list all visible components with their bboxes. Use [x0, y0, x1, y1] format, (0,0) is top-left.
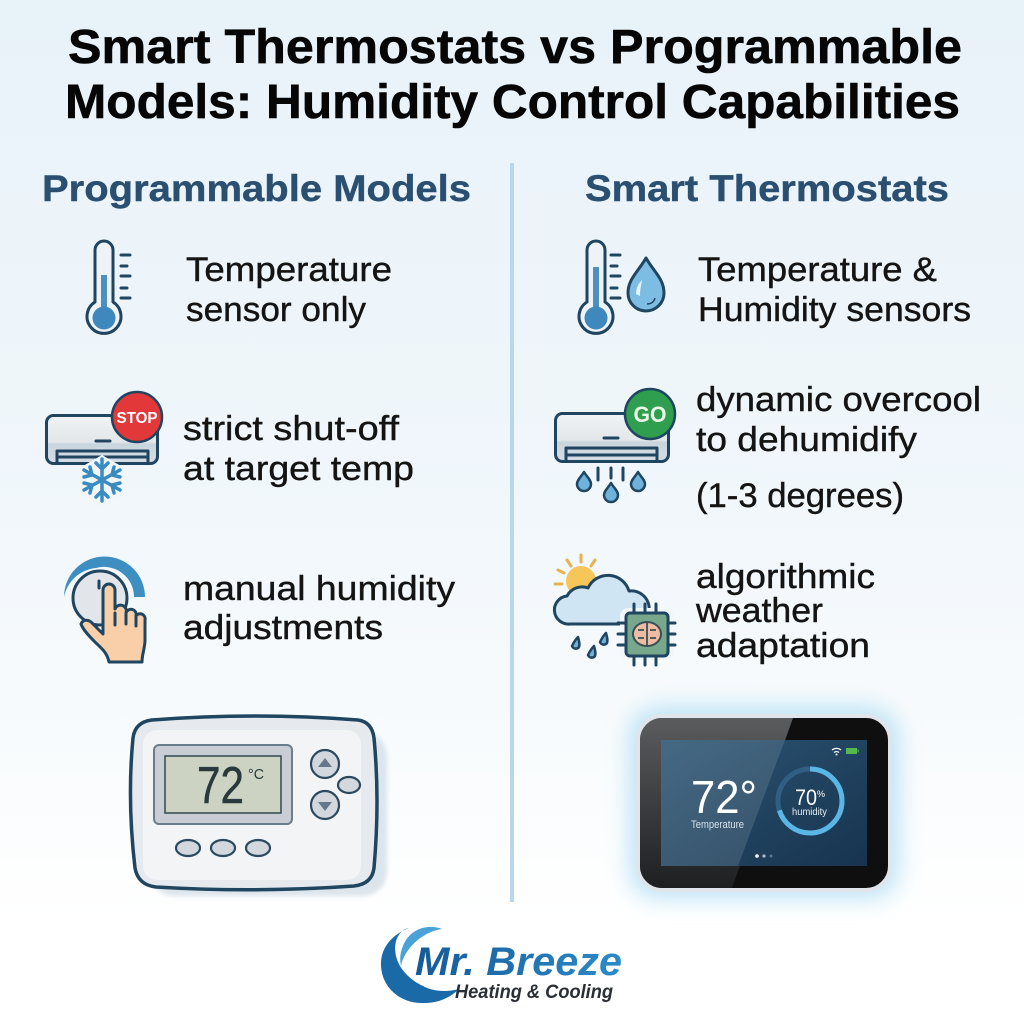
text: manual humidity adjustments: manual humidity [183, 570, 455, 608]
text: manual humidity adjustments [183, 570, 455, 647]
logo: Mr. Breeze Heating & Cooling [381, 927, 622, 1003]
text: algorithmic weather adaptation: algorithmic [696, 558, 875, 596]
icon: air conditioner with go sign [556, 389, 675, 502]
lcd reading: °C [248, 766, 264, 783]
text: temperature and humidity sensors [698, 251, 971, 329]
text: dynamic overcool to dehumidify: to dehumidify [696, 421, 917, 459]
page dots [755, 854, 772, 858]
icon: thermometer and water drop [579, 241, 664, 333]
title [65, 21, 962, 129]
logo: Mr. Breeze Heating & Cooling: Heating & Cooling [455, 982, 613, 1003]
humidity ring: % [817, 789, 825, 799]
illustration: programmable thermostat [130, 716, 387, 896]
icon: thermometer [87, 241, 130, 333]
text: manual humidity adjustments: adjustments [183, 609, 383, 647]
thermostat buttons [176, 750, 360, 856]
humidity ring: humidity [792, 806, 828, 818]
icon: snowflake [78, 455, 126, 507]
logo swoosh [381, 927, 459, 1003]
heading: programmable models: Programmable Models [42, 168, 471, 209]
text: algorithmic weather adaptation: adaptation [696, 627, 870, 665]
title: Models: Humidity Control Capabilities [65, 76, 960, 129]
text: strict shut-off at target temp [183, 410, 414, 488]
humidity ring [778, 769, 842, 833]
sun [555, 555, 596, 596]
text: dynamic overcool to dehumidify [696, 381, 981, 515]
status icons [832, 748, 859, 756]
lcd reading: 72 [197, 757, 244, 815]
text: strict shut-off at target temp: at target temp [183, 450, 414, 488]
panel: programmable models [42, 168, 471, 896]
text: strict shut-off at target temp: strict shut-off [183, 410, 400, 448]
text: temperature sensor only: sensor only [186, 291, 366, 329]
icon: air conditioner with stop sign: STOP [116, 410, 158, 427]
panel: smart thermostats [554, 168, 981, 898]
heading: smart thermostats: Smart Thermostats [585, 168, 949, 209]
text: temperature sensor only [186, 251, 392, 329]
humidity ring: 70 [795, 785, 817, 810]
logo: Mr. Breeze Heating & Cooling: Mr. Breeze [415, 940, 622, 984]
screen temperature: 72° [691, 771, 757, 823]
icon: air conditioner with stop sign [46, 392, 162, 507]
screen temperature: Temperature [691, 819, 744, 831]
title: Smart Thermostats vs Programmable [68, 21, 962, 74]
text: temperature sensor only: Temperature [186, 251, 392, 289]
text: dynamic overcool to dehumidify: dynamic overcool [696, 381, 981, 419]
icon: hand turning dial [64, 556, 145, 662]
condensation drops [577, 468, 645, 502]
text: temperature and humidity sensors: Humidity sensors [698, 291, 971, 329]
text: algorithmic weather adaptation [695, 558, 875, 665]
text: algorithmic weather adaptation: weather [695, 592, 823, 630]
text: temperature and humidity sensors: Temperature & [698, 251, 937, 289]
icon: weather cloud with AI chip [554, 555, 675, 665]
icon: air conditioner with go sign: GO [634, 402, 666, 427]
illustration: smart thermostat [630, 708, 898, 898]
text: dynamic overcool to dehumidify: (1-3 degrees) [696, 477, 904, 515]
